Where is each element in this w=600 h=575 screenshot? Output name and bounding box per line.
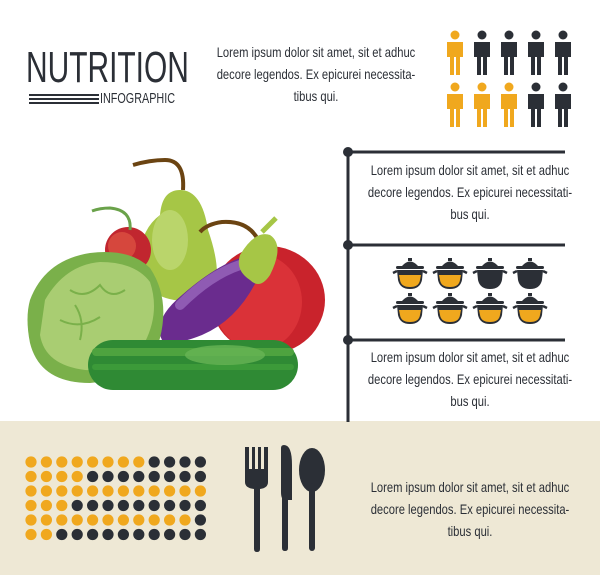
text block: timeline 2: Lorem ipsum dolor sit amet, sit et adhuc (371, 349, 569, 365)
icon grid: pots (392, 258, 548, 324)
timeline (343, 147, 565, 422)
text block: timeline 1: bus qui. (450, 206, 490, 222)
text block: top: Lorem ipsum dolor sit amet, sit et adhuc (217, 44, 415, 60)
eggplant (160, 218, 278, 343)
text block: timeline 1 (368, 162, 572, 222)
dot matrix chart (25, 456, 206, 540)
text block: top: tibus qui. (294, 88, 338, 104)
cucumber (88, 340, 298, 390)
beige footer band (0, 421, 600, 575)
lettuce (28, 252, 163, 383)
icon grid: people (447, 30, 571, 127)
tomato (200, 222, 325, 354)
title: NUTRITION (26, 43, 189, 92)
icon: cutlery (245, 445, 325, 552)
text block: bottom: tibus qui. (448, 523, 492, 539)
pear (133, 160, 217, 301)
text block: timeline 2: bus qui. (450, 393, 490, 409)
text block: timeline 1: decore legendos. Ex epicurei necessitati- (368, 184, 572, 200)
text block: bottom: decore legendos. Ex epicurei necessita- (371, 501, 569, 517)
text block: top: decore legendos. Ex epicurei necessita- (217, 66, 415, 82)
illustration: vegetables (28, 158, 325, 390)
text block: timeline 2 (368, 349, 572, 409)
text block: timeline 1: Lorem ipsum dolor sit amet, sit et adhuc (371, 162, 569, 178)
text block: top (217, 44, 415, 104)
text block: timeline 2: decore legendos. Ex epicurei necessitati- (368, 371, 572, 387)
text block: bottom (371, 479, 569, 539)
cherry (92, 208, 151, 273)
text block: bottom: Lorem ipsum dolor sit amet, sit et adhuc (371, 479, 569, 495)
title: INFOGRAPHIC (100, 90, 175, 107)
